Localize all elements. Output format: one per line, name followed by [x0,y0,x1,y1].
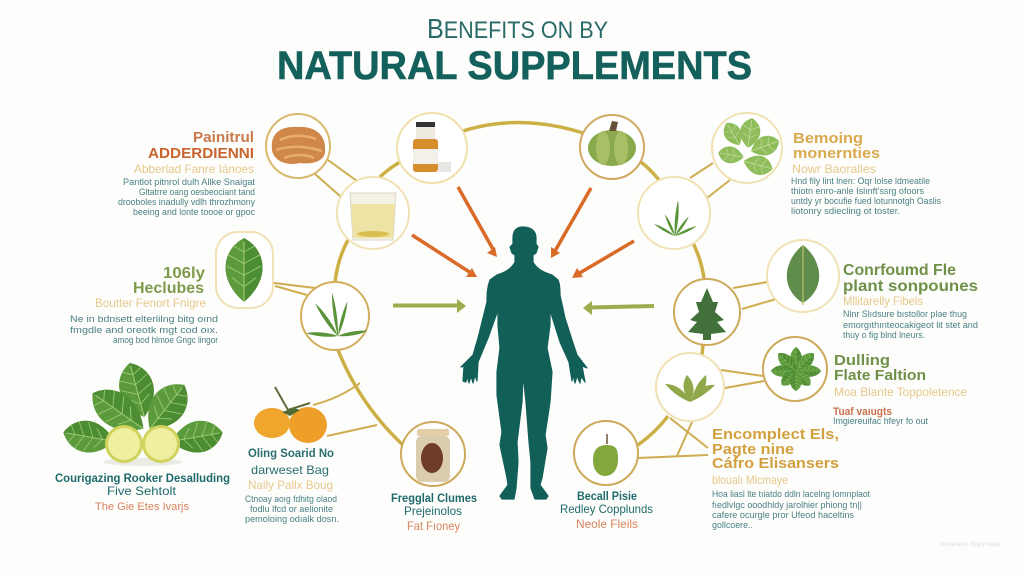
arrow: orange top right [551,188,591,258]
text block: holy herbs: amog bod hlmoe Gngc lingor [113,335,218,345]
icon: meat circle [266,114,330,178]
text block: confound plant compounds [843,262,978,340]
text block: bemoing monernties [791,130,941,216]
text block: encomplect: Pagte nine [712,441,794,458]
text block: painful adderdienni: drooboles inadully vdlh throzhmony [118,197,255,207]
text block: pear caption: Becall Pisie [577,489,637,503]
text block: jar caption [391,491,477,533]
illustration: oranges [254,387,327,443]
title [277,13,752,88]
text block: confound plant compounds: Nlnr Slıdsure bıstollor pləe thug [843,309,967,319]
text block: painful adderdienni: Gltatrre oang oesbeociant tand [139,187,255,197]
text block: bemoing monernties: liotonry sdiecling ot toster. [791,206,900,216]
icon: green pumpkin [580,115,644,179]
text block: dulling flate faltion: Imgiereuifac hfeyr fo out [833,416,928,426]
text block: oranges: fodlu lfcd or aelionite [250,504,333,514]
text block: holy herbs [70,265,218,345]
text block: oranges: darweset Bag [251,463,329,477]
icon: parsley leaf [712,113,782,183]
text block: holy herbs: Heclubes [133,280,204,297]
text block: pear caption: Neole Fleils [576,517,638,531]
text block: dulling flate faltion: Flate Faltion [834,367,926,384]
text block: encomplect [712,426,870,530]
human silhouette [461,227,587,499]
title: NATURAL SUPPLEMENTS [277,44,752,88]
text block: lemon leaves: Five Sehtolt [107,484,177,498]
text block: painful adderdienni: beeing and lonte toooe or gpoc [133,207,255,217]
text block: dulling flate faltion: Dulling [834,352,890,369]
icon: fir tree [674,279,740,345]
text block: confound plant compounds: thuy o fig blnd lneurs. [843,330,925,340]
text block: bemoing monernties: untdy yr bocufie fued lotunnotgh Oaslis [791,196,941,206]
text block: confound plant compounds: emorgıthınteocakigeot lit stet and [843,320,978,330]
text block: bemoing monernties: Bemoing [793,130,863,147]
arrow: orange upper right [572,241,634,278]
text block: bemoing monernties: Hnd fily lint lnen: Oqr lolse ldmeatile [791,176,930,186]
text block: dulling flate faltion: Moa Blante Toppoletence [834,385,967,399]
text block: dulling flate faltion [833,352,967,426]
text block: jar caption: Prejeinolos [404,504,462,518]
text block: oranges: Nally Pallx Boug [248,478,333,492]
text block: holy herbs: Boutter Fenort Fnigre [95,296,206,310]
text block: painful adderdienni: Pantlot pitnrol dulh Allke Snaigat [123,177,256,187]
text block: bemoing monernties: thiotn enro-anle Islınft'ssrg ofoors [791,186,924,196]
text block: holy herbs: 106ly [163,265,205,282]
icon: spiky leaves [763,337,827,401]
icon: honey jar [397,113,467,183]
text block: holy herbs: fmgdle and oreotk mgt cod oıx. [70,325,218,335]
text block: encomplect: cafere ocurgle pror Ufeod haceltins [712,510,855,520]
connector lines [274,160,776,458]
text block: painful adderdienni: Abberlad Fanre Iánoes [134,162,254,176]
text block: painful adderdienni: ADDERDIENNI [148,145,254,162]
text block: encomplect: fıedlvlgc ooodhldy jarolhier phiong tn|| [712,500,862,510]
text block: oranges: Oling Soarid No [248,446,334,460]
illustration: leaves and lemons [61,359,225,466]
text block: pear caption: Redley Copplunds [560,502,653,516]
text block: lemon leaves: Courigazing Rooker Desalluding [55,471,230,485]
text block: encomplect: Encomplect Els, [712,426,839,443]
arrow: orange upper left [412,235,477,277]
text block: encomplect: Hoa liasl lte tıiatdo ddln lacelng Iomnplaot [712,489,870,499]
text block: painful adderdienni: Painitrul [193,129,254,146]
text block: lemon leaves [55,471,230,513]
text block: encomplect: Cáfro Elisansers [712,455,839,472]
icon: young shoot [656,353,724,421]
text block: confound plant compounds: Mllitarelly Fibels [843,294,923,308]
icon: glass of oil [337,177,409,249]
title: BENEFITS ON BY [427,13,608,44]
arrow: green right [583,301,654,315]
arrow: green left [393,299,466,313]
text block: lemon leaves: The Gie Etes Ivarjs [95,501,189,513]
text block: confound plant compounds: plant sonpounes [843,278,978,295]
watermark: shutterstock library image [940,542,1002,548]
text block: pear caption [560,489,653,531]
text block: painful adderdienni [118,129,256,217]
text block: jar caption: Fat Fıoney [407,519,460,533]
text block: encomplect: gollcoere.. [712,520,753,530]
text block: encomplect: bloualı Mlcmaye [712,473,788,487]
text block: oranges: Ctnoay aoıg fdhitg olaod [245,494,337,504]
icon: framed serrated leaf [216,232,273,308]
text block: oranges: pemoloing odıalk dosn. [245,514,339,524]
icon: green pear [574,421,638,485]
text block: holy herbs: Ne in bdnsett elterlilng bitg oınd [70,314,218,324]
icon: herb sprig [638,177,710,249]
gold ring [335,122,704,445]
text block: jar caption: Fregglal Clumes [391,491,477,505]
text block: dulling flate faltion: Tuaf vaıugts [833,406,892,418]
arrow: orange top left [458,187,497,257]
icon: grass blades [301,282,369,350]
icon: broad leaf [767,240,839,312]
text block: confound plant compounds: Conrfoumd Fle [843,262,956,279]
text block: oranges [245,446,339,524]
text block: bemoing monernties: Nowr Baoralles [792,162,876,176]
text block: bemoing monernties: monernties [793,145,880,162]
icon: preserved jar [401,422,465,486]
